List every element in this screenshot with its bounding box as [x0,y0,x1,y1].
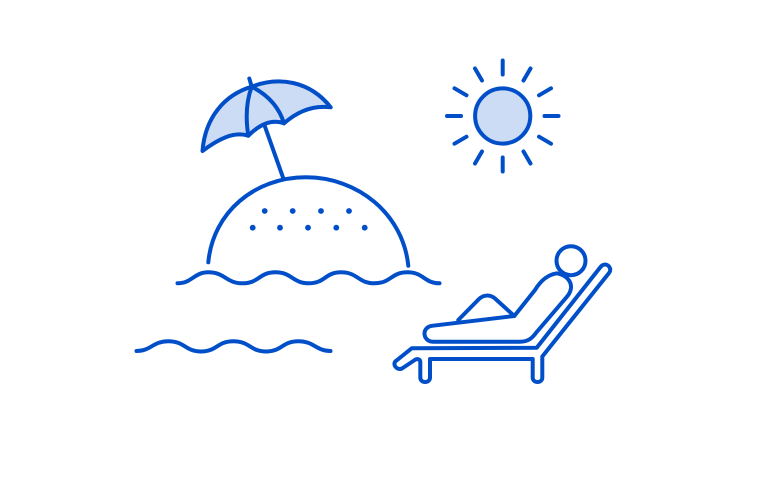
sand dots [250,208,368,231]
wave: lower [136,341,330,352]
person body [424,273,571,342]
person knee [458,296,514,320]
wave: upper [178,272,440,283]
icon: person on sun lounger [394,246,610,382]
lounger frame [394,265,610,382]
island [208,177,408,266]
icon: sun [447,60,558,172]
person head [556,246,586,275]
icon: beach umbrella [202,78,331,178]
